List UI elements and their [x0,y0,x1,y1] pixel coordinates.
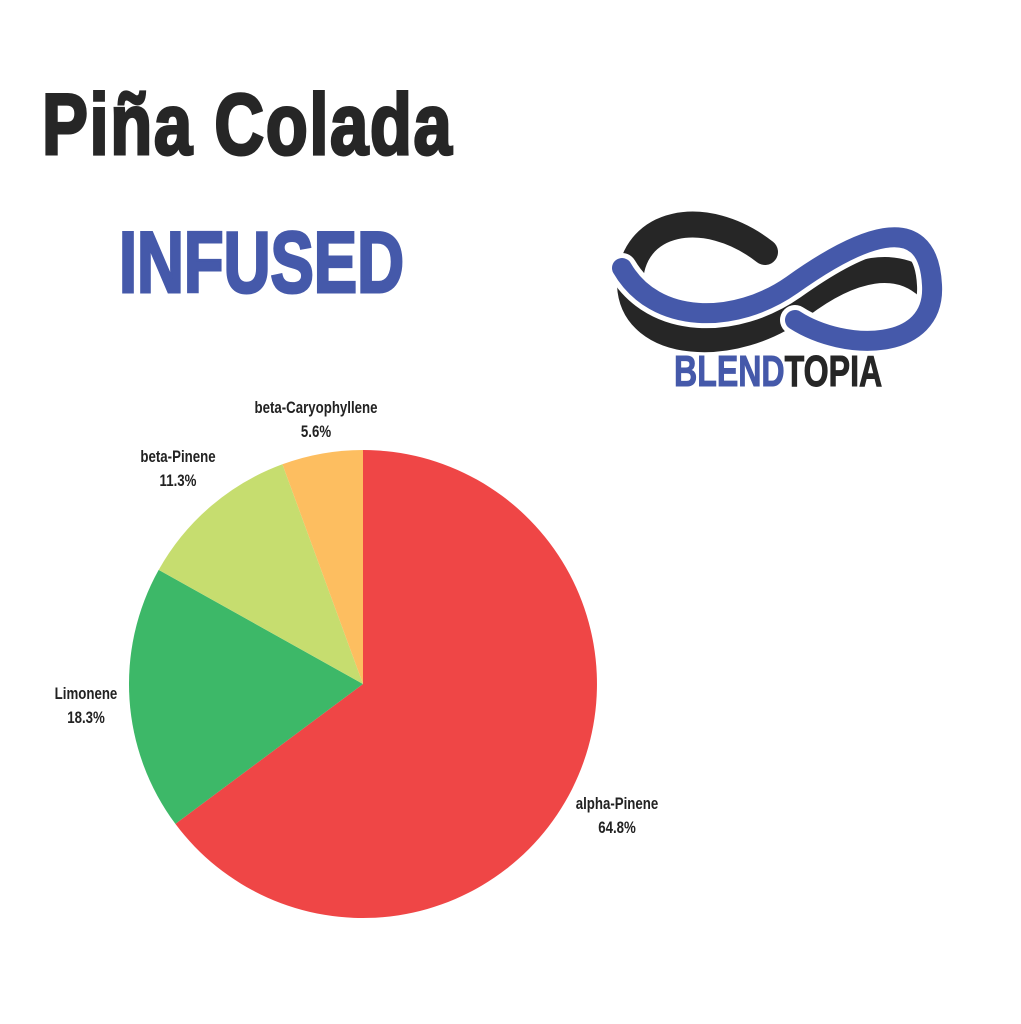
logo text: BLENDTOPIA [674,347,882,396]
title: Piña Colada [42,77,453,173]
label: alpha-Pinene: alpha-Pinene [576,794,658,813]
label: beta-Pinene [140,447,216,490]
label: Limonene [55,684,117,727]
slice: beta-Caryophyllene [282,450,363,684]
label: alpha-Pinene: 64.8% [598,818,636,837]
slice: beta-Pinene [159,464,363,684]
label: alpha-Pinene [576,794,658,837]
logo: blendtopia [612,212,942,396]
label: beta-Caryophyllene [254,398,378,441]
label: beta-Caryophyllene: 5.6% [301,422,331,441]
slice: Limonene [129,570,363,824]
label: Limonene: Limonene [55,684,117,703]
subtitle: infused: INFUSED [119,215,404,311]
icon: infinity [622,225,933,341]
label: beta-Caryophyllene: beta-Caryophyllene [254,398,378,417]
label: Limonene: 18.3% [67,708,105,727]
slice: alpha-Pinene [175,450,597,918]
label: beta-Pinene: beta-Pinene [140,447,216,466]
label: beta-Pinene: 11.3% [160,471,196,490]
